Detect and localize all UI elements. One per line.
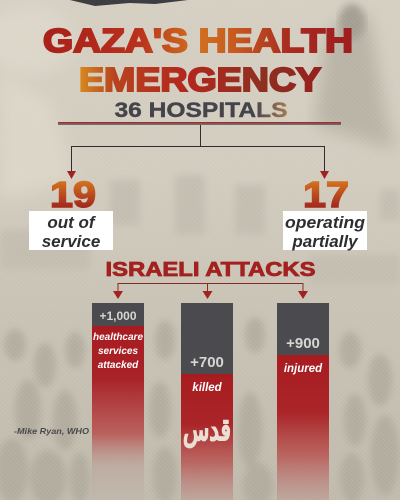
title <box>43 22 353 98</box>
stat: 17 operating partially: partially <box>291 232 359 251</box>
bar: injured: +900 <box>286 335 320 352</box>
stat: 19 out of service <box>29 174 113 251</box>
source credit: -Mike Ryan, WHO <box>14 426 89 436</box>
bar: healthcare services attacked: attacked <box>98 360 139 371</box>
bar: healthcare services attacked: +1,000 <box>99 309 137 323</box>
bar: injured <box>277 303 329 500</box>
bar: injured: injured <box>284 363 323 375</box>
logo: Quds wordmark: قدس <box>183 414 231 448</box>
bar: killed <box>181 303 233 500</box>
heading: Israeli attacks: ISRAELI ATTACKS <box>106 259 316 281</box>
stat: 19 out of service: service <box>42 232 100 251</box>
attack arrows <box>113 284 308 299</box>
stat: 17 operating partially: 17 <box>303 174 349 215</box>
bar: healthcare services attacked: services <box>98 346 138 357</box>
stat: 17 operating partially: operating <box>285 213 366 232</box>
stat: 19 out of service: out of <box>47 213 97 232</box>
tree connector: hospitals split <box>58 122 341 179</box>
title: EMERGENCY <box>79 61 321 98</box>
stat: 17 operating partially <box>283 174 367 251</box>
stat: 19 out of service: 19 <box>50 174 96 215</box>
subtitle: 36 hospitals: 36 HOSPITALS <box>114 99 288 122</box>
bar: killed: +700 <box>190 354 224 371</box>
bar: killed: killed <box>192 382 223 394</box>
bar: healthcare services attacked <box>92 303 144 500</box>
title: GAZA'S HEALTH <box>43 22 353 59</box>
bar: healthcare services attacked: healthcare <box>93 332 143 343</box>
